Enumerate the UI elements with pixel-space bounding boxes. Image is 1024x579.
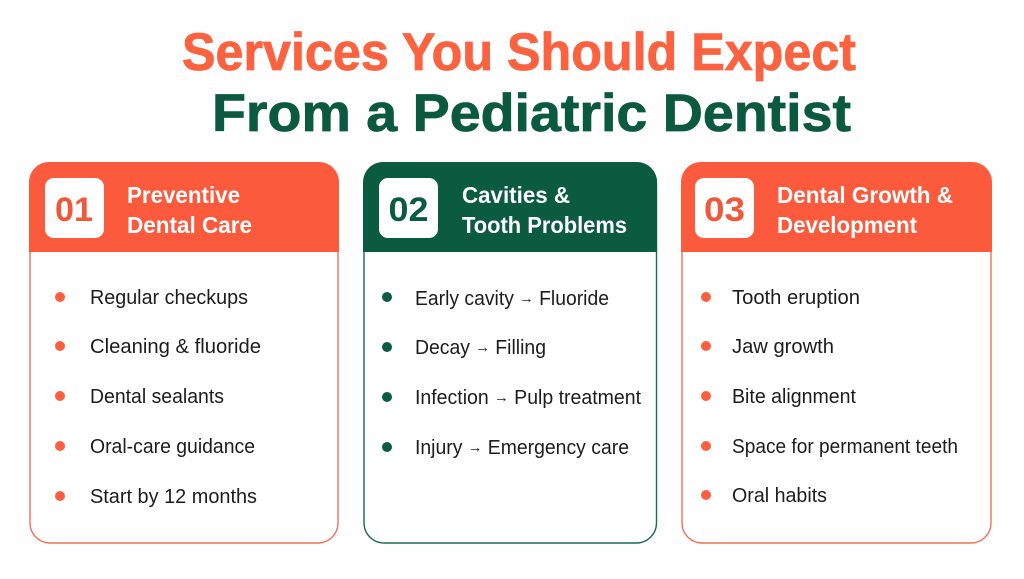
header: preventive dental care <box>29 162 339 252</box>
list: cavity treatment items: → <box>494 389 509 406</box>
header: dental growth and development: Development <box>777 212 917 238</box>
header: cavities and tooth problems: 02 <box>388 191 428 229</box>
list: growth and development items: Tooth eruption <box>732 287 860 309</box>
header: cavities and tooth problems: Tooth Problems <box>462 212 627 238</box>
list: growth and development items: Oral habits <box>732 485 827 507</box>
list: preventive care items: Oral-care guidance <box>90 436 255 458</box>
panel: dental growth and development <box>681 162 992 543</box>
title: From a Pediatric Dentist <box>212 84 851 143</box>
list: growth and development items: Bite alignment <box>732 386 856 408</box>
list: cavity treatment items: → <box>475 339 490 356</box>
list: cavity treatment items: Filling <box>490 337 546 359</box>
list: cavity treatment items: Infection <box>415 387 491 409</box>
list: cavity treatment items: Injury <box>415 437 464 459</box>
list: preventive care items <box>55 287 261 508</box>
list: cavity treatment items <box>382 288 641 459</box>
panel: preventive dental care <box>29 162 339 543</box>
list: cavity treatment items: Early cavity <box>415 288 517 310</box>
header: dental growth and development: Dental Growth & <box>777 182 953 208</box>
list: preventive care items: Regular checkups <box>90 287 248 309</box>
list: cavity treatment items: Emergency care <box>482 437 629 459</box>
header: preventive dental care: Preventive <box>127 182 240 208</box>
title <box>182 23 856 143</box>
list: cavity treatment items: Fluoride <box>534 288 609 310</box>
list: preventive care items: Cleaning & fluoride <box>90 336 261 358</box>
header: cavities and tooth problems <box>363 162 657 252</box>
header: preventive dental care: Dental Care <box>127 212 252 238</box>
list: growth and development items: Space for permanent teeth <box>732 436 958 458</box>
header: preventive dental care: 01 <box>55 191 93 229</box>
list: cavity treatment items: → <box>519 290 534 307</box>
list: preventive care items: Dental sealants <box>90 386 224 408</box>
list: preventive care items: Start by 12 months <box>90 486 257 508</box>
panel: cavities and tooth problems <box>363 162 657 543</box>
header: dental growth and development: 03 <box>704 191 745 229</box>
list: cavity treatment items: → <box>468 439 482 456</box>
title: Services You Should Expect <box>182 23 856 82</box>
list: growth and development items <box>701 287 958 507</box>
list: growth and development items: Jaw growth <box>732 336 834 358</box>
list: cavity treatment items: Decay <box>415 337 472 359</box>
list: cavity treatment items: Pulp treatment <box>509 387 641 409</box>
header: cavities and tooth problems: Cavities & <box>462 182 570 208</box>
header: dental growth and development <box>681 162 992 252</box>
